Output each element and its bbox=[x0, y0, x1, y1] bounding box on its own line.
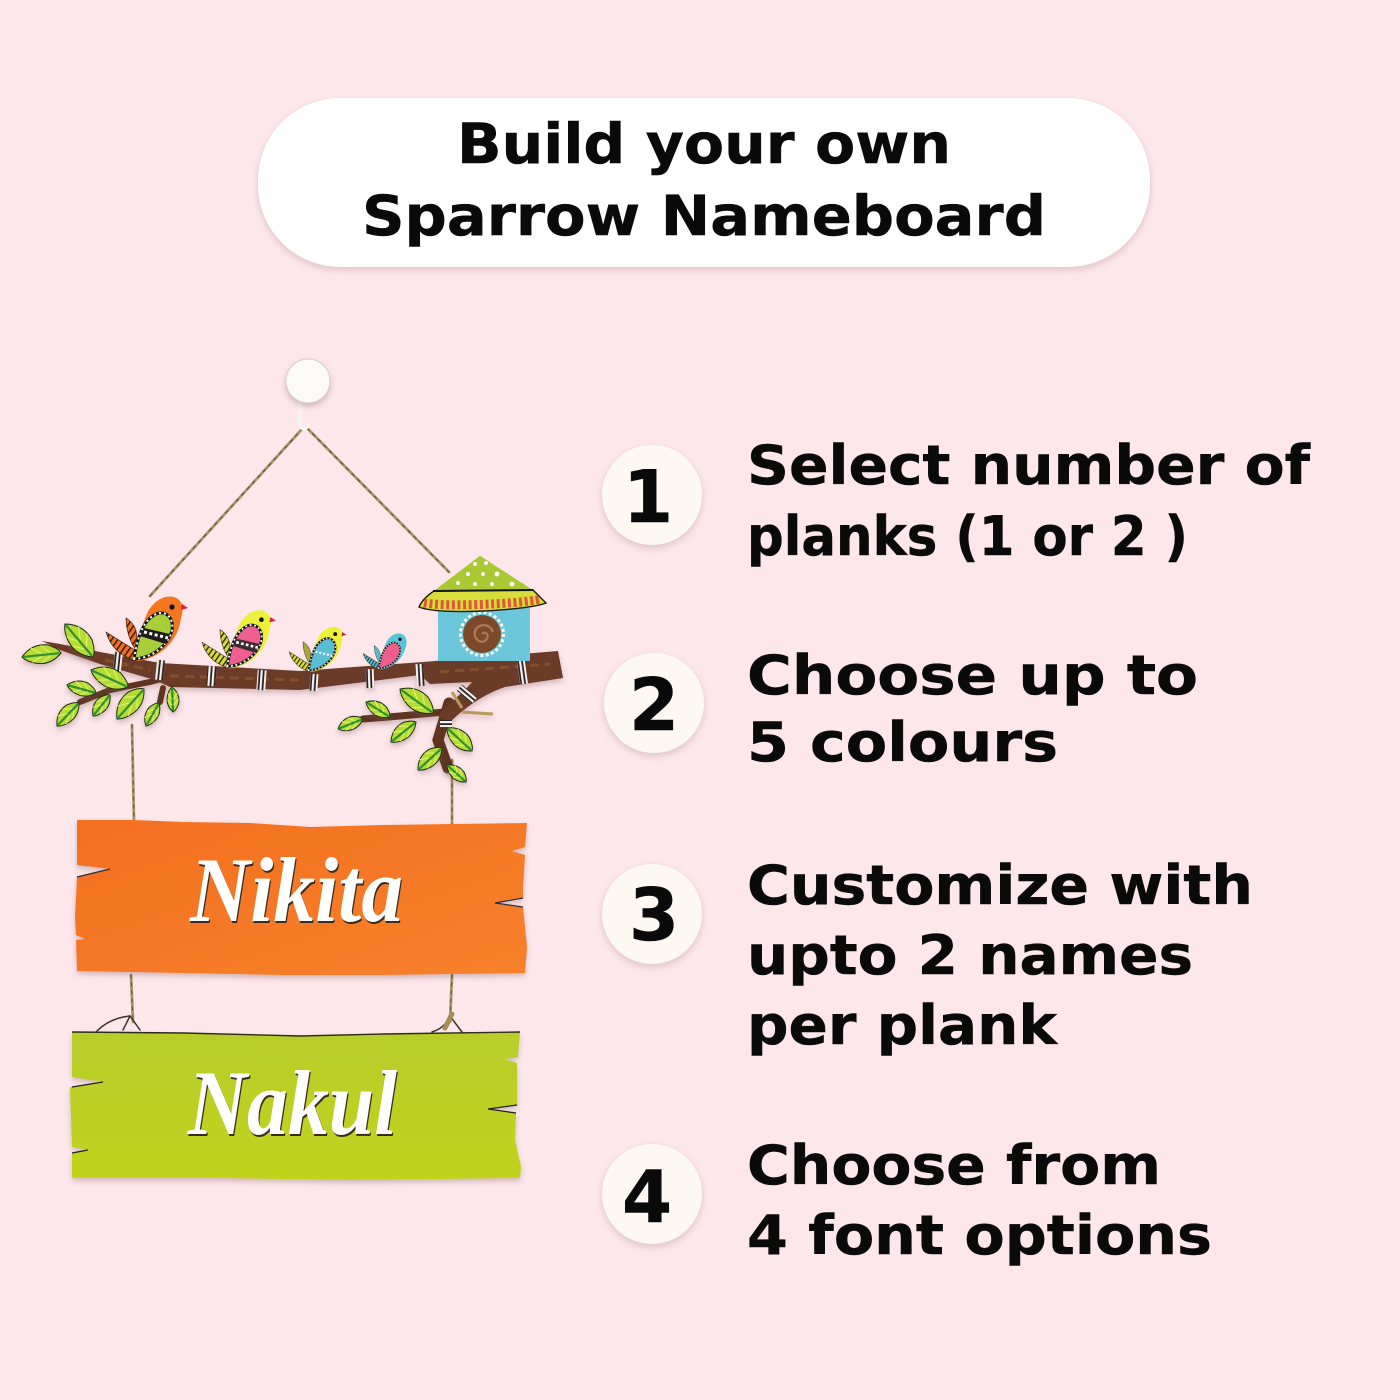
step 1 text: planks (1 or 2 ) bbox=[747, 505, 1188, 568]
wall hook bbox=[286, 359, 330, 429]
hanging twine bbox=[97, 428, 462, 1032]
step 4 bbox=[602, 1134, 1212, 1267]
step 3 number: 3 bbox=[629, 873, 679, 957]
product illustration: sparrow nameboard bbox=[21, 359, 563, 1180]
step 4 text: 4 font options bbox=[747, 1204, 1212, 1267]
title text: Build your own bbox=[457, 112, 951, 176]
bird: orange bbox=[106, 596, 188, 661]
name: Nikita: Nikita bbox=[189, 839, 403, 941]
step 2 text: Choose up to bbox=[747, 644, 1198, 707]
leaves bbox=[21, 617, 478, 786]
name: Nakul: Nakul bbox=[187, 1052, 397, 1154]
title pill bbox=[258, 98, 1150, 267]
step 2 number: 2 bbox=[629, 663, 679, 747]
step 4 number: 4 bbox=[622, 1155, 672, 1239]
step 1 text: Select number of bbox=[747, 434, 1311, 497]
branch bbox=[42, 641, 563, 768]
title text: Sparrow Nameboard bbox=[362, 184, 1046, 248]
step 3 text: per plank bbox=[747, 994, 1058, 1057]
step 2 bbox=[604, 644, 1198, 774]
bird: blue and pink bbox=[363, 633, 407, 670]
orange plank bbox=[75, 820, 527, 975]
step 4 text: Choose from bbox=[747, 1134, 1161, 1197]
step 3 text: Customize with bbox=[747, 854, 1253, 917]
birdhouse bbox=[419, 557, 546, 661]
green plank bbox=[70, 1032, 521, 1180]
bird: yellow and pink bbox=[202, 610, 276, 668]
step 2 text: 5 colours bbox=[747, 711, 1058, 774]
step 1 bbox=[602, 434, 1311, 568]
step 3 bbox=[602, 854, 1253, 1057]
step 1 number: 1 bbox=[623, 455, 673, 539]
bird: yellow and blue bbox=[289, 627, 346, 672]
step 3 text: upto 2 names bbox=[747, 924, 1193, 987]
